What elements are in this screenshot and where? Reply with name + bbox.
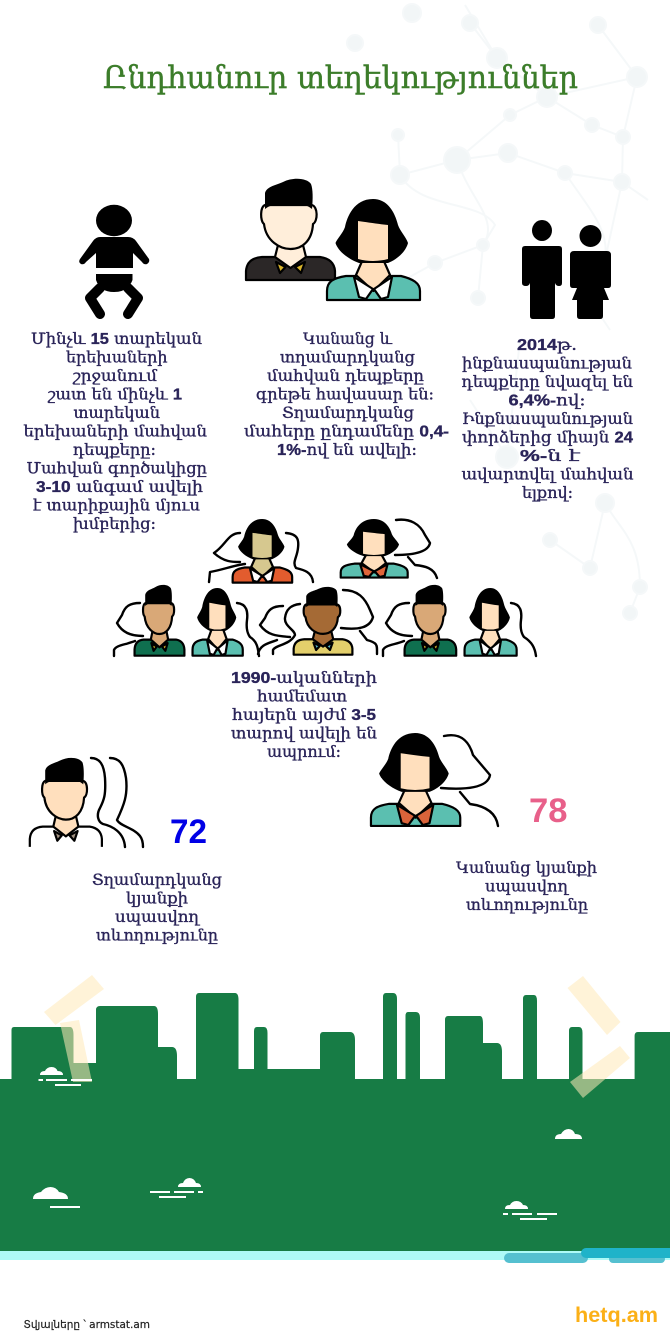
text block: life span increase: հայերն այժմ 3-5 [232, 705, 376, 724]
text block: women and men: գրեթե հավասար են: [256, 384, 434, 404]
text block: women and men: մահերը ընդամենը 0,4- [244, 422, 449, 440]
text block: women life expectancy [456, 858, 597, 914]
icon: baby [79, 205, 149, 314]
text block: men life expectancy: կյանքի [126, 888, 188, 908]
text block: children: Մինչև 15 տարեկան [31, 329, 202, 348]
text block: life span increase: ապրում: [267, 742, 341, 761]
text block: children: խմբերից: [73, 514, 156, 533]
logo: hetq.am: hetq.am [575, 1304, 658, 1327]
text block: women and men [244, 329, 449, 459]
row 2 man yellow [294, 587, 352, 655]
icon: man and woman [246, 179, 420, 300]
text block: life span increase: տարով ավելի են [231, 724, 377, 742]
text block: women and men: մահվան դեպքերը [267, 366, 424, 385]
text block: children: երեխաների մահվան [24, 422, 207, 440]
text block: children: շրջանում [72, 366, 158, 385]
text block: men life expectancy: տևողությունը [96, 926, 218, 944]
text block: men life expectancy: սպասվող [115, 907, 201, 926]
text block: life span increase [231, 668, 377, 761]
text block: suicide: ինքնասպանության [462, 354, 632, 372]
clouds [33, 1067, 582, 1220]
icon: woman with outline [371, 733, 498, 826]
text block: men life expectancy: Տղամարդկանց [92, 870, 222, 889]
text block: children: երեխաների [66, 348, 168, 366]
woman [327, 199, 420, 300]
text block: suicide: ավարտվել մահվան [462, 464, 634, 484]
decorative pale arrows [44, 975, 630, 1098]
city skyline [0, 993, 670, 1251]
text block: suicide [462, 335, 634, 502]
row 2 man green second [405, 585, 456, 656]
text block: children [24, 329, 207, 533]
row 1 woman teal [341, 519, 408, 578]
text block: women life expectancy: Կանանց կյանքի [456, 858, 597, 877]
icon: man with outlines [30, 758, 143, 847]
water pools [504, 1248, 670, 1263]
text block: women life expectancy: սպասվող [485, 876, 570, 896]
row 1 woman orange [233, 519, 292, 583]
title: Ընդհանուր տեղեկություններ [103, 60, 578, 96]
text block: women life expectancy: տևողությունը [466, 895, 588, 914]
text block: suicide: %- ն է [520, 446, 581, 465]
row 2 woman teal second [465, 588, 517, 656]
number: men 72: 72 [170, 813, 207, 851]
text block: life span increase: 1990- ականների [231, 668, 377, 687]
text block: suicide: ելքով: [522, 483, 573, 502]
ghost outlines [114, 520, 536, 656]
text block: suicide: դեպքերը նվազել են [462, 372, 633, 391]
icon: crowd of people [114, 519, 536, 656]
text block: suicide: 6,4%- ով: [508, 390, 586, 410]
text block: women and men: տղամարդկանց [280, 348, 415, 366]
text block: women and men: Տղամարդկանց [282, 403, 414, 422]
text block: children: շատ են մինչև 1 [47, 384, 182, 404]
number: women 78: 78 [529, 792, 568, 830]
text block: children: Մահվան գործակիցը [26, 458, 207, 478]
text block: men life expectancy [92, 870, 222, 944]
ground stripe [0, 1251, 670, 1260]
text block: suicide: փորձերից միայն 24 [462, 428, 633, 446]
row 2 woman teal [193, 588, 243, 656]
text block: women and men: 1%-ով են ավելի: [277, 440, 417, 459]
text block: life span increase: համեմատ [257, 686, 347, 706]
background network pattern [347, 4, 648, 620]
text block: suicide: Ինքնասպանության [462, 409, 633, 428]
icon: adult silhouettes [522, 220, 611, 319]
text block: children: է տարիքային մյուս [33, 496, 200, 514]
text block: women and men: Կանանց և [303, 329, 392, 348]
text block: children: 3-10 անգամ ավելի [36, 477, 203, 496]
text block: suicide: 2014 թ. [517, 335, 577, 354]
row 2 man green [135, 585, 184, 656]
text block: children: տարեկան [74, 403, 160, 422]
source credit: Տվյալները ՝ armstat.am [24, 1318, 150, 1331]
text block: children: դեպքերը: [73, 440, 156, 459]
man [246, 179, 335, 280]
